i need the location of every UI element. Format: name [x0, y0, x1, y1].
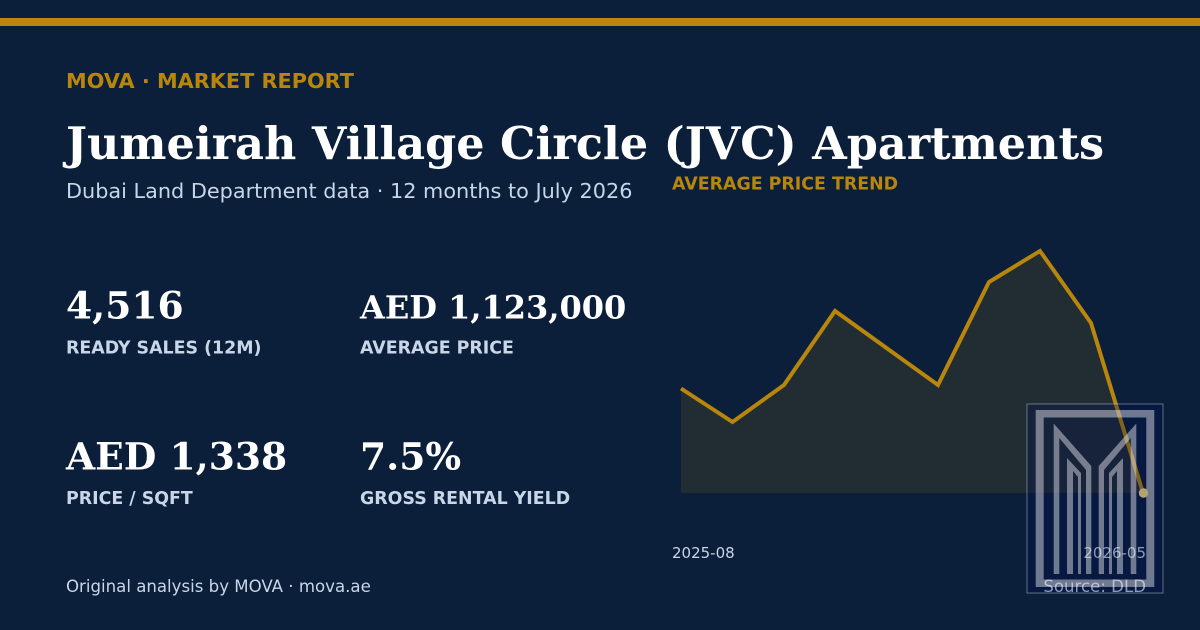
stat: price per sqft: AED 1,338	[65, 434, 287, 478]
stat: rental yield	[360, 434, 570, 509]
title: Jumeirah Village Circle (JVC) Apartments	[62, 118, 1104, 170]
source note: Source: DLD	[1043, 577, 1146, 596]
logo watermark	[1027, 404, 1163, 593]
chart heading: AVERAGE PRICE TREND	[672, 174, 898, 194]
area line chart	[681, 251, 1143, 493]
eyebrow label: MOVA · MARKET REPORT	[66, 69, 355, 93]
chart end-point marker	[1139, 488, 1148, 498]
stat: average price: AED 1,123,000	[359, 288, 626, 326]
stat: average price: AVERAGE PRICE	[360, 338, 514, 358]
x-axis end label: 2026-05	[1083, 544, 1146, 562]
stat: ready sales: READY SALES (12M)	[66, 338, 261, 358]
footer credit: Original analysis by MOVA · mova.ae	[66, 577, 371, 596]
stat: price per sqft: PRICE / SQFT	[66, 489, 193, 509]
x-axis start label: 2025-08	[672, 544, 735, 562]
stat: ready sales	[66, 284, 261, 358]
stat: price per sqft	[65, 434, 287, 509]
stat: ready sales: 4,516	[66, 284, 184, 328]
stat: average price	[359, 288, 626, 358]
top accent bar	[0, 18, 1200, 26]
subtitle: Dubai Land Department data · 12 months to July 2026	[66, 179, 632, 203]
stat: rental yield: 7.5%	[360, 434, 461, 478]
stat: rental yield: GROSS RENTAL YIELD	[360, 489, 570, 509]
